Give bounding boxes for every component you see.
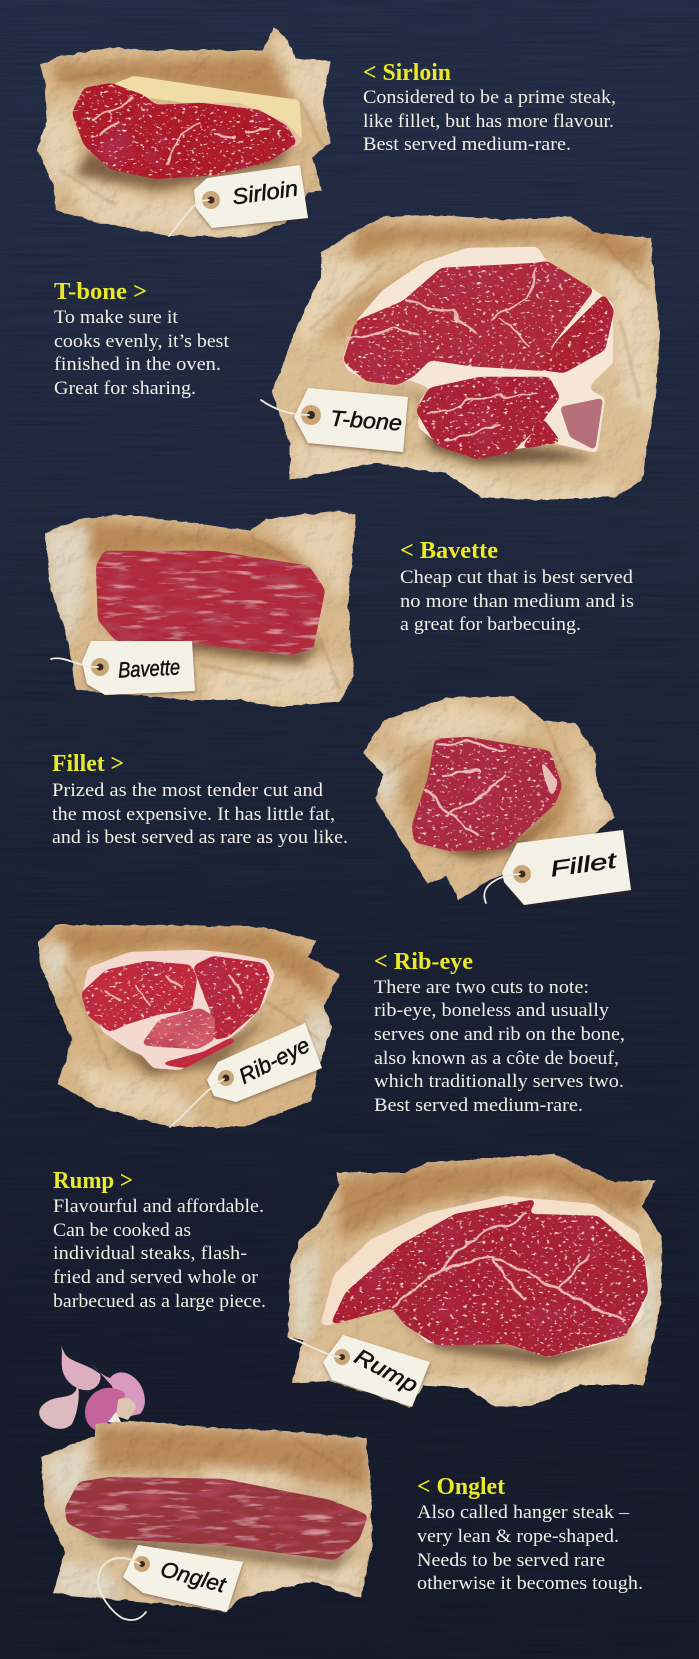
paper: onglet <box>35 1415 380 1620</box>
body: no more than medium and is <box>400 591 634 612</box>
body: otherwise it becomes tough. <box>417 1573 643 1594</box>
paper: fillet <box>355 690 620 905</box>
body: barbecued as a large piece. <box>53 1291 266 1312</box>
body: individual steaks, flash- <box>53 1243 247 1264</box>
body: like fillet, but has more flavour. <box>363 111 614 132</box>
body: Also called hanger steak – <box>417 1502 630 1523</box>
body: Can be cooked as <box>53 1220 191 1241</box>
tag label: Rump <box>350 1344 422 1398</box>
paper: t-bone <box>265 210 665 505</box>
heading: T-bone > <box>54 279 147 305</box>
body <box>53 1196 266 1312</box>
body: also known as a côte de boeuf, <box>374 1048 619 1069</box>
meat: bavette <box>96 551 325 665</box>
body: Needs to be served rare <box>417 1550 605 1571</box>
eyelet <box>218 1070 234 1086</box>
body <box>400 567 634 635</box>
meat: sirloin <box>72 76 303 190</box>
meat: fillet <box>412 737 562 858</box>
meat: onglet <box>65 1477 368 1570</box>
string <box>484 874 520 903</box>
panel: rump <box>285 1150 665 1412</box>
tag: fillet <box>484 830 631 905</box>
body: very lean & rope-shaped. <box>417 1526 619 1547</box>
body: Best served medium-rare. <box>363 134 571 155</box>
paper: sirloin <box>37 28 330 238</box>
text: rib-eye <box>374 949 625 1116</box>
paper: rib-eye <box>30 920 345 1132</box>
heading: < Sirloin <box>363 60 451 86</box>
tag label: Fillet <box>549 847 619 882</box>
meat: rump <box>321 1196 649 1365</box>
string <box>290 1338 340 1357</box>
heading: Fillet > <box>52 751 124 777</box>
tag: rib-eye <box>170 1023 322 1127</box>
tag: onglet <box>98 1545 243 1620</box>
meat: t-bone <box>343 247 614 465</box>
text: onglet <box>417 1474 643 1594</box>
text: sirloin <box>363 60 616 155</box>
body: Cheap cut that is best served <box>400 567 634 588</box>
body: finished in the oven. <box>54 354 221 375</box>
panel: sirloin <box>37 28 330 238</box>
body <box>54 307 230 399</box>
body: To make sure it <box>54 307 179 328</box>
body: Best served medium-rare. <box>374 1095 583 1116</box>
eyelet <box>134 1556 150 1572</box>
tag: t-bone <box>261 388 408 452</box>
string <box>169 200 209 236</box>
body: which traditionally serves two. <box>374 1071 624 1092</box>
body: a great for barbecuing. <box>400 614 581 635</box>
panel: fillet <box>355 690 631 905</box>
body: rib-eye, boneless and usually <box>374 1000 610 1021</box>
text: t-bone <box>54 279 230 399</box>
heading: < Rib-eye <box>374 949 473 975</box>
body <box>417 1502 643 1594</box>
heading: < Onglet <box>417 1474 505 1500</box>
body: Considered to be a prime steak, <box>363 87 616 108</box>
tag label: Bavette <box>117 654 181 683</box>
heading: < Bavette <box>400 538 498 564</box>
paper: bavette <box>40 505 360 715</box>
string <box>98 1558 146 1620</box>
tag: rump <box>290 1335 430 1407</box>
string <box>170 1079 224 1127</box>
tag label: Sirloin <box>231 176 299 209</box>
panel: rib-eye <box>30 920 345 1132</box>
eyelet <box>202 191 220 209</box>
panel: bavette <box>40 505 360 715</box>
icon: garlic cloves <box>39 1346 145 1430</box>
eyelet <box>91 658 109 676</box>
tag label: Rib-eye <box>235 1032 314 1089</box>
body <box>374 977 625 1116</box>
body: and is best served as rare as you like. <box>52 827 348 848</box>
tag: sirloin <box>169 165 308 236</box>
meat: rib-eye <box>81 950 275 1075</box>
text: bavette <box>400 538 634 635</box>
panel: onglet <box>35 1415 380 1620</box>
string <box>261 400 309 415</box>
string <box>51 658 98 667</box>
eyelet <box>334 1349 350 1365</box>
text: rump <box>53 1168 266 1312</box>
text: fillet <box>52 751 348 848</box>
body: There are two cuts to note: <box>374 977 589 998</box>
eyelet <box>513 865 531 883</box>
body: Great for sharing. <box>54 378 196 399</box>
tag label: T-bone <box>329 406 403 435</box>
heading: Rump > <box>53 1168 133 1194</box>
paper: rump <box>285 1150 665 1412</box>
tag label: Onglet <box>158 1556 229 1598</box>
body: fried and served whole or <box>53 1267 259 1288</box>
body: serves one and rib on the bone, <box>374 1024 625 1045</box>
body <box>363 87 616 155</box>
eyelet <box>301 405 321 425</box>
body: cooks evenly, it’s best <box>54 331 230 352</box>
body: Flavourful and affordable. <box>53 1196 264 1217</box>
body: Prized as the most tender cut and <box>52 780 324 801</box>
body <box>52 780 348 848</box>
tag: bavette <box>51 641 195 695</box>
panel: t-bone <box>261 210 665 505</box>
body: the most expensive. It has little fat, <box>52 804 335 825</box>
